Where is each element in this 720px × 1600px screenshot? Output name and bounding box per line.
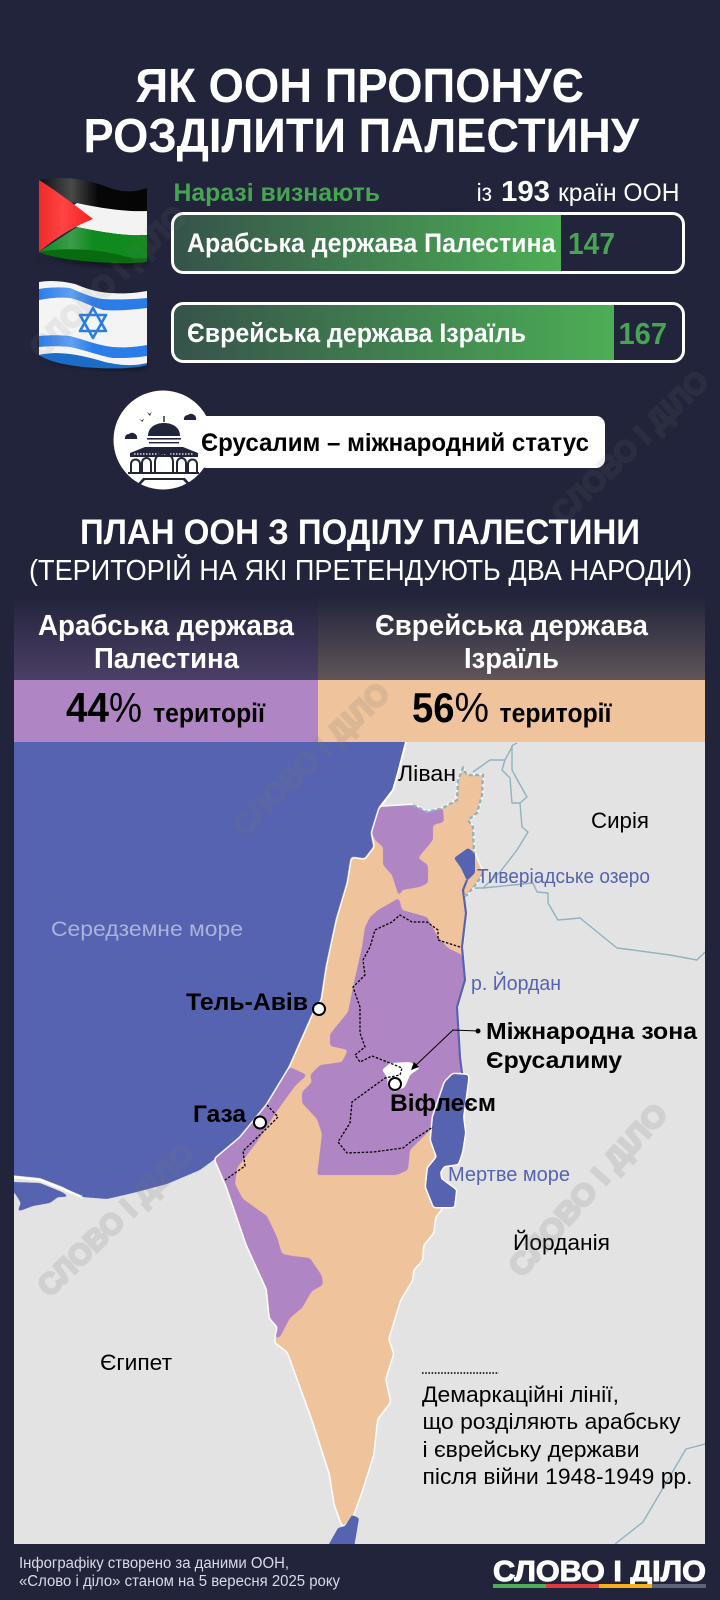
coast outline north and delta xyxy=(14,742,406,1197)
bar: Israel 167: 167 xyxy=(618,316,667,351)
heading: UN partition plan xyxy=(29,513,692,587)
label: Lebanon: Ліван xyxy=(398,761,456,786)
bar: Palestine 147: 147 xyxy=(568,226,615,261)
map xyxy=(0,725,705,1560)
legend: demarcation lines: і єврейську держави xyxy=(422,1437,640,1462)
territory: Arab state south-west xyxy=(215,1067,323,1339)
label: Jerusalem international zone: Міжнародна зона xyxy=(486,1018,697,1044)
Dead Sea outline xyxy=(426,1074,468,1207)
panel: 56 percent territory: території xyxy=(500,698,613,728)
recognition label: currently recognised: Наразі визнають xyxy=(174,179,380,207)
label pill xyxy=(198,416,605,468)
label: Mediterranean Sea: Середземне море xyxy=(51,918,243,941)
label: Tel Aviv: Тель-Авів xyxy=(186,989,308,1016)
watermarks on dark background: СЛОВО І ДІЛО xyxy=(546,365,715,530)
panel: 44 percent territory: території xyxy=(153,698,266,728)
label: Bethlehem: Віфлеєм xyxy=(390,1090,496,1117)
demarcation line West Bank xyxy=(338,915,460,1153)
marker: Bethlehem xyxy=(389,1078,401,1090)
label: Dead Sea: Мертве море xyxy=(448,1164,570,1186)
label: Gaza: Газа xyxy=(193,1101,247,1128)
territory: Jewish state xyxy=(215,768,483,1527)
recognition label: of 193 UN countries: 193 xyxy=(501,176,550,208)
label: Syria: Сирія xyxy=(591,808,649,833)
panel: 56 percent territory: 56 xyxy=(412,684,454,731)
panel: Arab state header xyxy=(14,596,318,680)
recognition label: of 193 UN countries: із xyxy=(477,179,492,207)
panel: Jewish state header: Ізраїль xyxy=(464,643,559,675)
Gulf of Aqaba xyxy=(329,1516,359,1544)
label: Jordan river: р. Йордан xyxy=(471,971,561,995)
panel: 44 percent territory: 44 xyxy=(66,684,110,731)
icon: Palestine flag xyxy=(39,178,147,267)
bar: Israel 167: Єврейська держава Ізраїль xyxy=(187,318,526,348)
panel: Jewish state header: Єврейська держава xyxy=(375,610,649,642)
title: ЯК ООН ПРОПОНУЄ xyxy=(136,60,584,113)
watermarks on map: СЛОВО І ДІЛО xyxy=(227,677,396,842)
legend: demarcation lines: що розділяють арабську xyxy=(422,1409,681,1434)
panel: 56 percent territory xyxy=(318,680,705,742)
callout: Jerusalem international status xyxy=(114,390,605,490)
icon: Dome of the Rock xyxy=(114,390,212,490)
Jordan river xyxy=(457,880,467,1073)
panel: Jewish state header xyxy=(318,596,705,680)
footer source note xyxy=(19,1555,340,1590)
territory: Arab state centre xyxy=(302,898,465,1176)
legend: demarcation lines: Демаркаційні лінії, xyxy=(422,1382,619,1407)
watermarks on map: СЛОВО І ДІЛО xyxy=(503,1098,674,1283)
heading: UN partition plan: (ТЕРИТОРІЙ НА ЯКІ ПРЕТЕНДУЮТЬ ДВА НАРОДИ) xyxy=(29,553,692,587)
label: Sea of Galilee: Тиверіадське озеро xyxy=(477,866,650,888)
Nile delta lake xyxy=(14,1182,67,1211)
footer source note: «Слово і діло» станом на 5 вересня 2025 року xyxy=(19,1573,340,1590)
label: Egypt: Єгипет xyxy=(100,1350,172,1375)
marker: Gaza xyxy=(254,1116,266,1128)
Sea of Galilee xyxy=(454,848,475,881)
panel: 44 percent territory xyxy=(14,680,318,742)
heading: UN partition plan: ПЛАН ООН З ПОДІЛУ ПАЛЕСТИНИ xyxy=(80,513,640,552)
northern border dashed xyxy=(413,768,483,897)
arrow to Jerusalem zone xyxy=(411,1028,480,1070)
land xyxy=(14,742,705,1544)
bar: Palestine 147 xyxy=(172,214,684,272)
recognition label: of 193 UN countries xyxy=(477,176,680,208)
bar: Palestine 147: Арабська держава Палестина xyxy=(187,228,556,258)
territory: Arab state north xyxy=(372,805,444,897)
logo: СЛОВО І ДІЛО xyxy=(493,1556,706,1588)
label: Jordan: Йорданія xyxy=(513,1230,610,1255)
recognition label: of 193 UN countries: країн ООН xyxy=(558,179,680,207)
panel: Arab state header: Арабська держава xyxy=(38,610,295,642)
marker: Tel Aviv xyxy=(313,1003,325,1015)
legend: demarcation lines: після війни 1948-1949 рр. xyxy=(422,1464,692,1489)
rivers and borders xyxy=(470,743,705,1544)
watermarks on map: СЛОВО І ДІЛО xyxy=(32,1138,201,1303)
label pill: Єрусалим – міжнародний статус xyxy=(201,429,589,457)
icon: Israel flag xyxy=(39,281,147,370)
territory outline xyxy=(215,768,483,1527)
Mediterranean Sea xyxy=(0,725,411,1199)
legend: demarcation lines xyxy=(422,1373,692,1489)
watermarks on dark background: СЛОВО І ДІЛО xyxy=(24,200,193,365)
title xyxy=(84,60,640,163)
label: Jerusalem international zone: Єрусалиму xyxy=(486,1047,622,1073)
panel: Arab state header: Палестина xyxy=(94,643,240,675)
bar: Israel 167 xyxy=(172,304,684,362)
Jerusalem international zone xyxy=(382,1062,420,1092)
panel: 44 percent territory: % xyxy=(109,684,142,731)
demarcation line Gaza xyxy=(225,1105,278,1180)
watermarks on map xyxy=(32,677,674,1303)
label: Jerusalem international zone xyxy=(486,1018,697,1073)
watermarks on dark background xyxy=(24,200,715,530)
panel: 56 percent territory: % xyxy=(454,684,489,731)
title: РОЗДІЛИТИ ПАЛЕСТИНУ xyxy=(84,110,640,163)
footer source note: Інфографіку створено за даними ООН, xyxy=(19,1555,289,1572)
Dead Sea xyxy=(426,1074,468,1207)
